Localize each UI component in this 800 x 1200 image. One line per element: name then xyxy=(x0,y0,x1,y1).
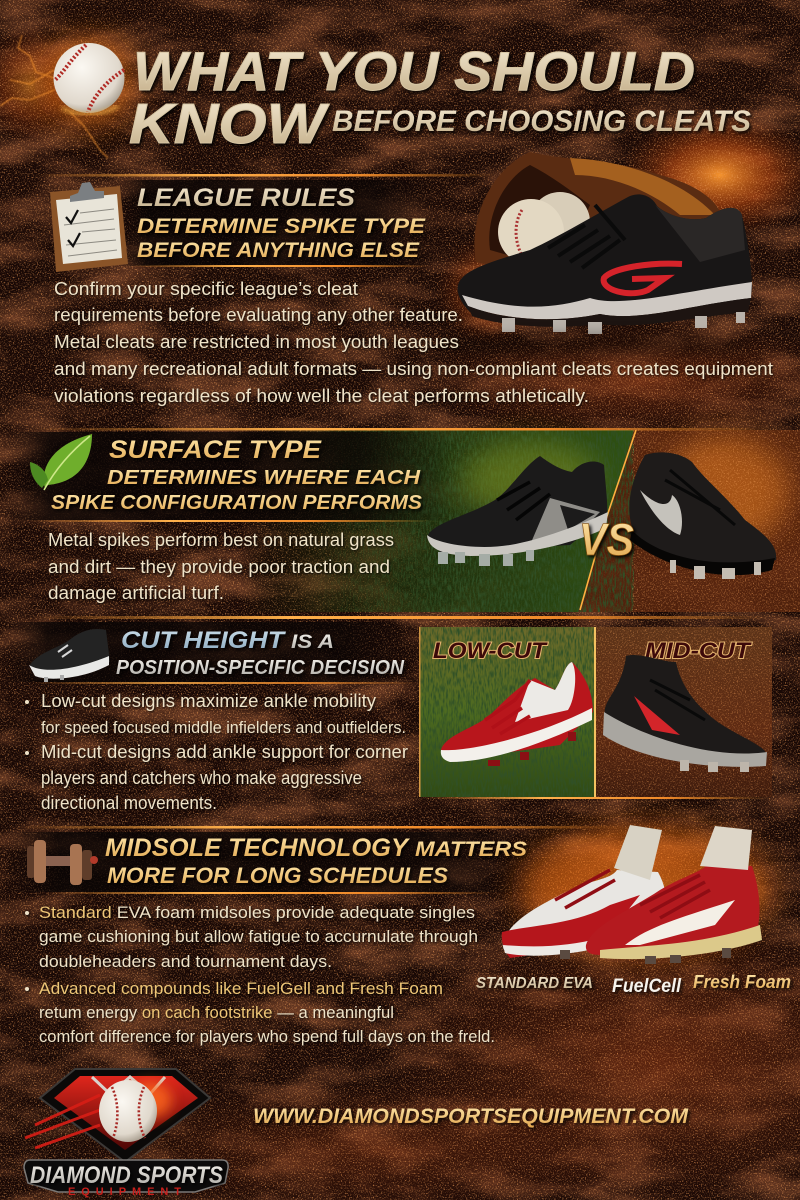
panel: surface backdrop grass and dirt xyxy=(240,430,800,612)
heading: surface type: SPIKE CONFIGURATION PERFORMS xyxy=(51,492,423,514)
logo: diamond sports equipment: EQUIPMENT xyxy=(68,1186,186,1198)
text block: surface type body: damage artificial turf. xyxy=(48,583,224,603)
title: WHAT YOU SHOULD xyxy=(133,40,695,102)
text block: midsole bullets: comfort difference for players who spend full days on the freld. xyxy=(39,1027,495,1046)
text block: league rules body xyxy=(54,279,773,406)
text block: midsole bullets: Advanced compounds like FuelGell and Fresh Foam xyxy=(39,979,443,998)
text block: cut height bullets: Mid-cut designs add ankle support for corner xyxy=(41,742,408,762)
text block: cut height bullets: directional movements. xyxy=(41,793,217,813)
heading: midsole technology: MATTERS xyxy=(415,838,527,861)
icon: black mid-cut cleat xyxy=(603,655,767,772)
text block: league rules body: Metal cleats are restricted in most youth leagues xyxy=(54,332,459,352)
heading: surface type: DETERMINES WHERE EACH xyxy=(107,467,421,489)
label: low-cut: LOW-CUT xyxy=(433,638,548,663)
heading: surface type: SURFACE TYPE xyxy=(109,436,322,464)
text block: midsole bullets: Standard EVA foam midsoles provide adequate singles xyxy=(39,903,475,922)
title: BEFORE CHOOSING CLEATS xyxy=(332,105,751,138)
heading: league rules: DETERMINE SPIKE TYPE xyxy=(137,215,426,238)
text block: league rules body: Confirm your specific league’s cleat xyxy=(54,279,358,299)
panel: cut height comparison backdrop xyxy=(419,627,772,797)
logo: diamond sports equipment: DIAMOND SPORTS xyxy=(30,1162,223,1189)
icon: glove, baseballs and black cleat xyxy=(450,152,752,357)
text block: league rules body: violations regardless of how well the cleat performs athletically. xyxy=(54,386,589,406)
icon: leaf xyxy=(30,434,92,490)
text block: league rules body: and many recreational adult formats — using non-compliant cleats creates equipment xyxy=(54,359,773,379)
heading: midsole technology: MORE FOR LONG SCHEDULES xyxy=(107,863,448,888)
heading: league rules: LEAGUE RULES xyxy=(137,184,355,212)
icon: red low-cut cleat xyxy=(441,662,593,766)
VS label: VS xyxy=(579,514,634,565)
dark heading bands xyxy=(5,180,540,892)
heading: cut height: CUT HEIGHT xyxy=(121,627,287,654)
labels: midsole foam types: FuelCell xyxy=(612,976,682,997)
text block: cut height bullets: Low-cut designs maximize ankle mobility xyxy=(41,691,376,711)
text block: cut height bullets: for speed focused middle infielders and outfielders. xyxy=(41,718,406,737)
heading: midsole technology xyxy=(105,834,527,888)
text block: cut height bullets xyxy=(25,691,408,813)
icon: black cleat on dirt xyxy=(629,452,776,579)
text block: league rules body: requirements before evaluating any other feature. xyxy=(54,305,463,325)
text block: midsole bullets xyxy=(25,903,495,1046)
title xyxy=(129,40,751,156)
heading: cut height: IS A xyxy=(291,632,334,653)
text block: cut height bullets: players and catchers who make aggressive xyxy=(41,768,362,788)
glowing section dividers xyxy=(15,174,770,894)
text block: surface type body xyxy=(48,530,394,603)
icon: dumbbell xyxy=(27,840,98,885)
heading: cut height: POSITION-SPECIFIC DECISION xyxy=(116,657,405,679)
labels: midsole foam types: Fresh Foam xyxy=(693,972,791,992)
icon: small cut height cleat xyxy=(29,629,110,682)
icon: black cleat on grass xyxy=(427,456,608,566)
labels: midsole foam types: STANDARD EVA xyxy=(476,975,593,992)
heading: surface type xyxy=(51,436,423,514)
heading: cut height xyxy=(116,627,405,679)
heading: league rules xyxy=(137,184,426,262)
title: KNOW xyxy=(129,92,330,156)
icon: baseball with sparks xyxy=(0,35,135,158)
text block: surface type body: and dirt — they provide poor traction and xyxy=(48,557,390,577)
label: mid-cut: MID-CUT xyxy=(645,638,752,663)
text block: surface type body: Metal spikes perform best on natural grass xyxy=(48,530,394,550)
text block: midsole bullets: retum energy on cach footstrike — a meaningful xyxy=(39,1003,394,1022)
text block: midsole bullets: game cushioning but allow fatigue to accurnulate through xyxy=(39,927,478,946)
labels: midsole foam types xyxy=(476,972,791,997)
heading: midsole technology: MIDSOLE TECHNOLOGY xyxy=(105,834,410,862)
website url: WWW.DIAMONDSPORTSEQUIPMENT.COM xyxy=(253,1105,688,1128)
icon: clipboard xyxy=(50,182,128,272)
text block: midsole bullets: doubleheaders and tournament days. xyxy=(39,952,332,971)
icon: pair of red cleats with socks xyxy=(502,825,770,964)
logo: diamond sports equipment xyxy=(24,1069,228,1198)
heading: league rules: BEFORE ANYTHING ELSE xyxy=(137,239,420,262)
